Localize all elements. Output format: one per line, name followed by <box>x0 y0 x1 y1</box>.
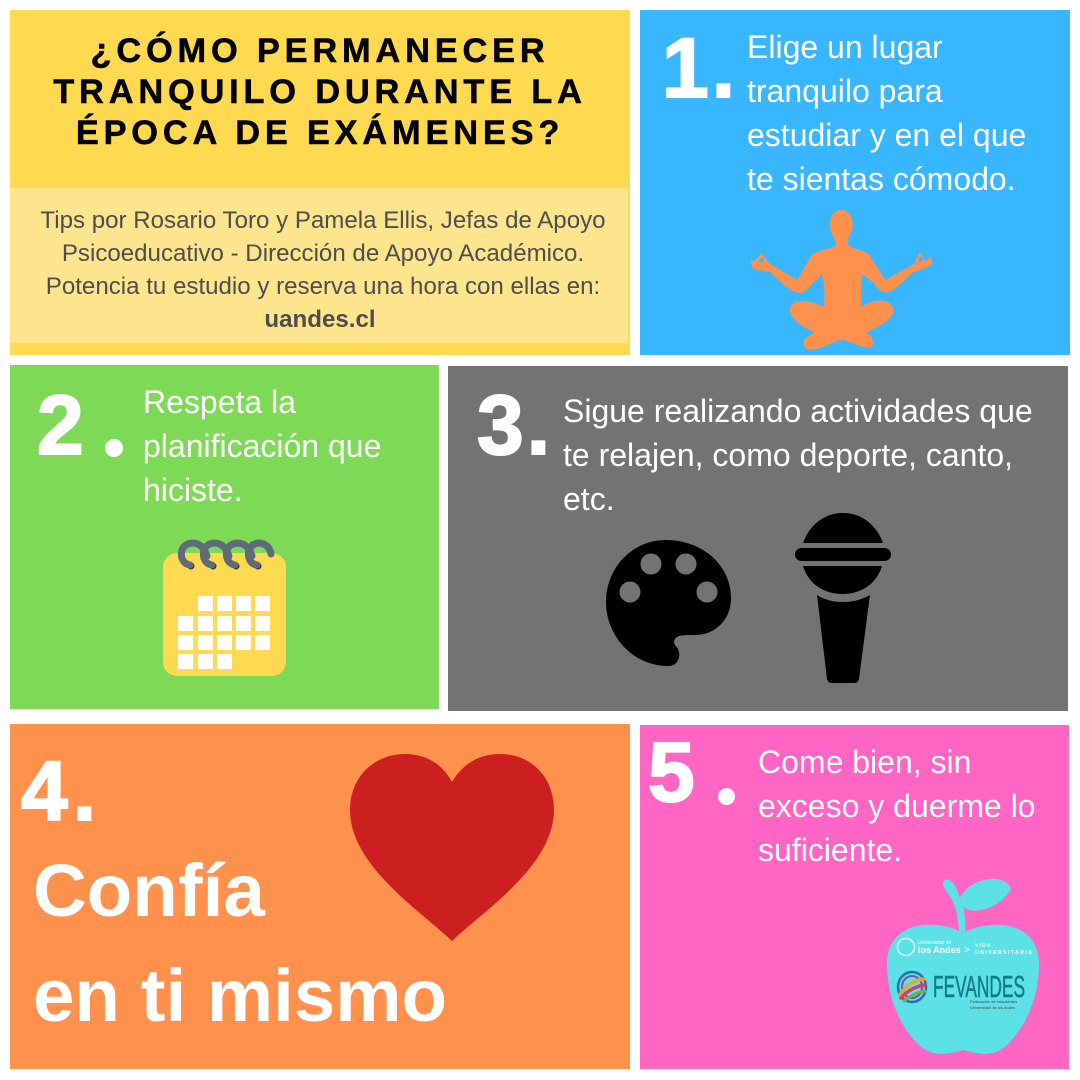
tip 1 text: Elige un lugar <box>747 29 943 65</box>
logo: Fevandes <box>898 969 1025 1010</box>
heading: ¿CÓMO PERMANECER <box>91 32 549 70</box>
tip 5 text <box>758 744 1035 868</box>
tip 2 text <box>143 384 381 508</box>
panel: title <box>10 10 630 355</box>
tip 2 text: Respeta la <box>143 384 296 420</box>
tip 4 text <box>33 849 447 1037</box>
logo: university: los Andes <box>918 945 961 955</box>
icon: meditating person <box>750 210 933 350</box>
number 5: 5 <box>648 725 698 819</box>
logo: university <box>898 938 1032 956</box>
tip 2 text: planificación que <box>143 428 381 464</box>
credits text: Psicoeducativo - Dirección de Apoyo Académico. <box>62 240 584 267</box>
credits text: Potencia tu estudio y reserva una hora con ellas en: <box>46 273 600 300</box>
tip 4 text: Confía <box>33 849 265 932</box>
logo: university: UNIVERSITARIA <box>975 950 1032 956</box>
tip 3 text <box>563 393 1033 517</box>
tip 2 text: hiciste. <box>143 472 243 508</box>
icon: calendar <box>163 540 286 676</box>
panel: tip 4 <box>10 724 630 1069</box>
tip 1 text: te sientas cómodo. <box>747 161 1016 197</box>
credits text <box>40 207 606 333</box>
tip 3 text: etc. <box>563 481 615 517</box>
panel: tip 1 <box>640 10 1070 355</box>
logo: Fevandes: Universidad de los Andes <box>970 1005 1015 1010</box>
heading: ÉPOCA DE EXÁMENES? <box>76 114 564 152</box>
panel: tip 5 <box>640 725 1069 1069</box>
number 2: 2 <box>37 378 87 472</box>
tip 1 text: tranquilo para <box>747 73 943 109</box>
credits text: uandes.cl <box>264 306 376 333</box>
heading: TRANQUILO DURANTE LA <box>53 73 587 111</box>
credits text: Tips por Rosario Toro y Pamela Ellis, Jefas de Apoyo <box>40 207 606 234</box>
panel: tip 2 <box>10 365 439 709</box>
icon: paint palette <box>606 540 731 666</box>
logo: university: Universidad de <box>918 940 952 946</box>
number 1: 1. <box>662 21 738 115</box>
icon: heart <box>350 754 554 941</box>
number 4: 4. <box>21 744 101 838</box>
tip 3 text: Sigue realizando actividades que <box>563 393 1033 429</box>
panel: tip 3 <box>448 366 1068 711</box>
logo: Fevandes: Federación de estudiantes <box>970 999 1017 1004</box>
tip 4 text: en ti mismo <box>33 954 447 1037</box>
tip 5 text: suficiente. <box>758 832 902 868</box>
heading <box>53 31 587 152</box>
icon: apple with logos <box>887 878 1039 1054</box>
number 5 dot <box>718 788 735 805</box>
tip 5 text: exceso y duerme lo <box>758 788 1035 824</box>
number 3: 3. <box>477 378 553 472</box>
icon: microphone <box>795 513 891 683</box>
tip 5 text: Come bien, sin <box>758 744 971 780</box>
tip 1 text: estudiar y en el que <box>747 117 1026 153</box>
panel: credits <box>10 188 628 343</box>
number 2 dot <box>105 439 123 457</box>
logo: university: VIDA <box>975 943 992 949</box>
tip 1 text <box>747 29 1026 197</box>
logo: university: > <box>964 945 970 956</box>
tip 3 text: te relajen, como deporte, canto, <box>563 437 1013 473</box>
